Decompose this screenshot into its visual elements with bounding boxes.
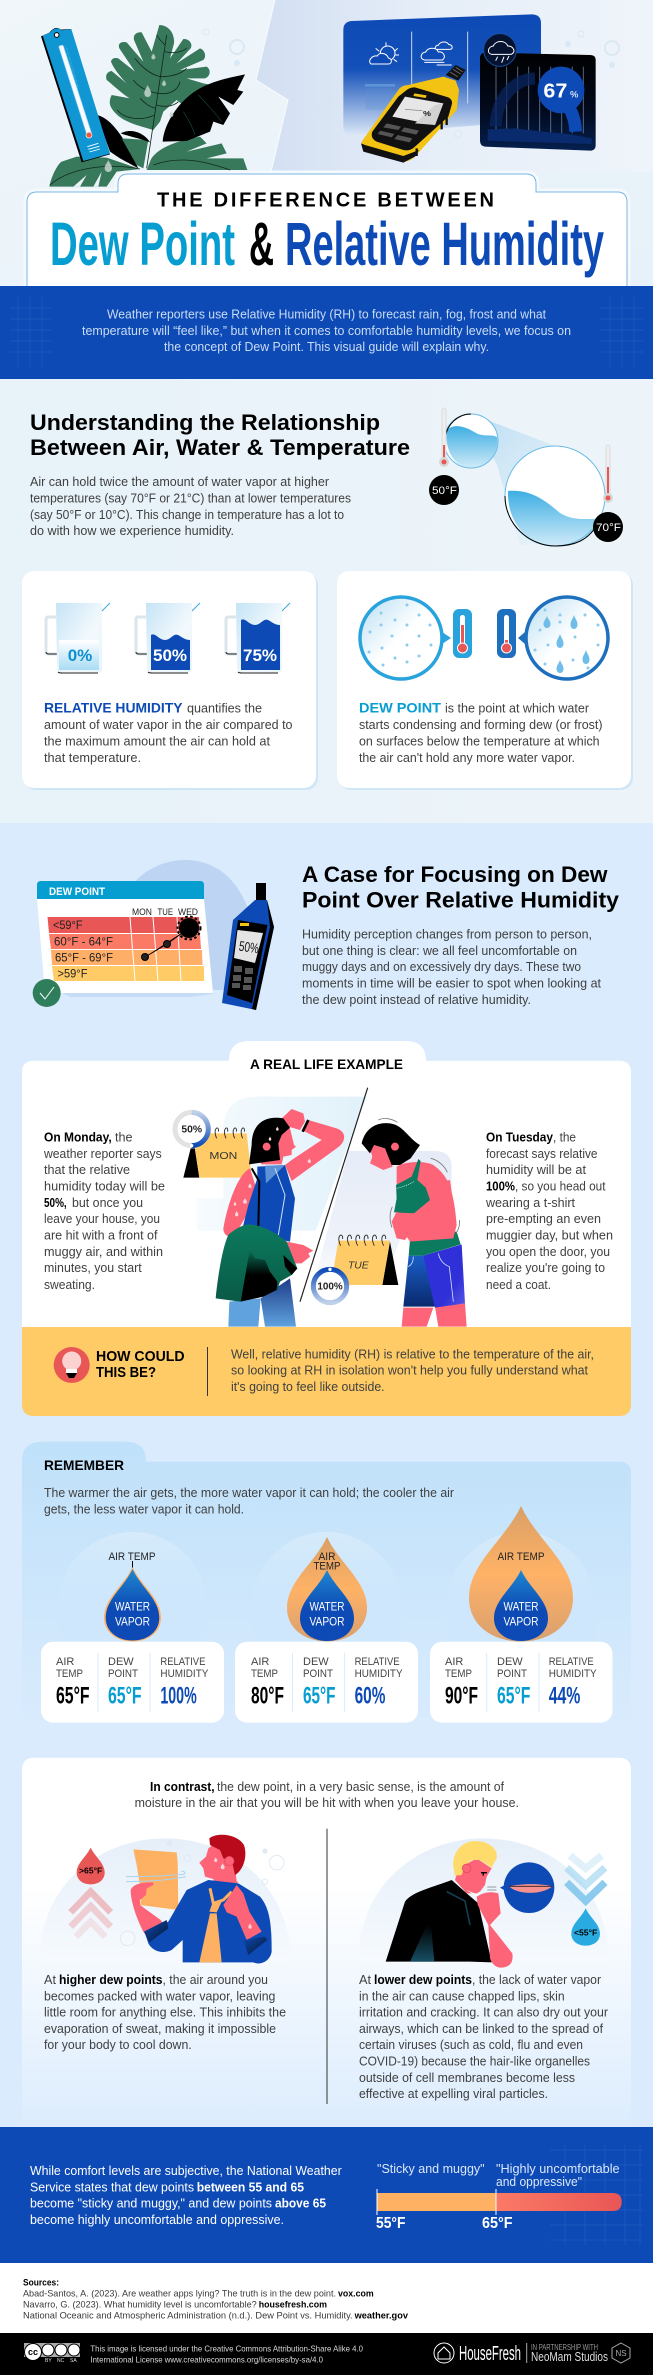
divider line between the two women [300,1088,368,1302]
icon: creative commons badge: BY [45,2358,52,2364]
logo: neomam studios: IN PARTNERSHIP WITH [531,2343,598,2352]
text: air can hold twice: do with how we experience humidity. [30,523,234,538]
illustration: air capacity circles: 50°F [432,485,457,497]
text: higher dew points: higher dew points [59,1972,162,1987]
text: on tuesday: 100% [486,1178,515,1194]
data card: 80°F air temp: DEW [303,1656,329,1668]
data card: 80°F air temp: 60% [355,1682,385,1710]
icon: jug 0% [46,603,110,673]
drop: 90°F [469,1506,573,1642]
sources: housefresh.com [259,2300,327,2310]
icon: drop above 65°F [77,1848,105,1884]
text: relative humidity definition: RELATIVE HUMIDITY [44,700,183,716]
heading: dew point and relative humidity: Dew Point [50,210,235,278]
data card: 65°F air temp [41,1642,224,1723]
heading: the difference between: THE DIFFERENCE BETWEEN [157,190,494,212]
drop: 80°F: VAPOR [310,1614,345,1628]
license text: This image is licensed under the Creative Commons Attribution-Share Alike 4.0 [90,2343,363,2353]
icon: creative commons badge: SA [70,2358,77,2364]
drop: 65°F: VAPOR [115,1614,150,1628]
text: on monday: that the relative [44,1162,130,1177]
illustration: dew point chart [33,860,254,1007]
section background: understanding [0,379,653,823]
data card: 90°F air temp: HUMIDITY [549,1668,597,1680]
data card: 90°F air temp: AIR [445,1656,463,1668]
illustration: air capacity circles [429,408,623,546]
text: on monday: weather reporter says [43,1146,162,1161]
text: higher dew points: little room for anything else. This inhibits the [44,2004,286,2020]
text: well relative humidity [231,1346,594,1394]
illustration: monstera plant [49,25,247,187]
data card: 90°F air temp: 90°F [445,1682,478,1710]
data card: 90°F air temp: TEMP [445,1668,472,1680]
text: well relative humidity: so looking at RH in isolation won't help you fully understand what [231,1362,588,1378]
intro text: Weather reporters use Relative Humidity (RH) to forecast rain, fog, frost and what [107,306,546,322]
heading: a case for focusing: A Case for Focusing on Dew [302,862,608,887]
text: well relative humidity: Well, relative humidity (RH) is relative to the temperature of the air, [231,1346,594,1362]
text: humidity perception [302,926,601,1007]
heading: a real life example: A REAL LIFE EXAMPLE [250,1056,403,1072]
calendar: MON: MON [209,1151,237,1162]
illustration: dew point chart: 60°F - 64°F [54,934,113,948]
text: air can hold twice: temperatures (say 70°F or 21°C) than at lower temperatures [30,490,351,506]
text: on monday [43,1130,165,1292]
title card [27,174,627,286]
heading: how could this be [96,1348,185,1381]
illustration: weather panel [343,14,541,135]
data card: 80°F air temp: AIR [251,1656,269,1668]
text: on monday: On Monday, [44,1130,112,1144]
text: relative humidity definition [44,700,292,765]
data card: 90°F air temp [430,1642,612,1723]
data card: 65°F air temp: 65°F [108,1682,142,1710]
icon: creative commons badge: NC [57,2358,65,2364]
logo: housefresh: HouseFresh [459,2343,521,2365]
text: on tuesday: pre-empting an even [486,1211,601,1226]
data card: 65°F air temp: TEMP [56,1668,83,1680]
text: higher dew points: At [44,1972,56,1987]
text: lower dew points: certain viruses (such as cold, flu and even [359,2037,583,2052]
text: humidity perception: muggy days and on excessively dry days. These two [302,959,581,974]
drop: 90°F: WATER [504,1600,539,1614]
text: in contrast intro: the dew point, in a very basic sense, is the amount of [217,1779,504,1794]
text: on monday: sweating. [44,1277,95,1292]
data card: 80°F air temp: 80°F [251,1682,284,1710]
text: while comfort levels: above 65 [275,2196,326,2210]
text: warmer air [44,1485,455,1516]
illustration: dew point chart: >59°F [58,966,88,980]
heading: remember: REMEMBER [44,1457,124,1473]
illustration: woman on monday [175,1097,367,1327]
text: higher dew points [44,1972,286,2052]
illustration: dew point chart: WED [178,907,198,917]
logo: housefresh [434,2343,521,2365]
gauge: 50% [175,1112,208,1147]
drop: 80°F: AIR [318,1551,336,1563]
background: header and first section [0,0,653,286]
license text: International License www.creativecommons.org/licenses/by-sa/4.0 [90,2355,323,2365]
icon: creative commons badge: cc [28,2347,38,2357]
drop: 80°F: WATER [310,1600,345,1614]
data card: 65°F air temp: 65°F [56,1682,90,1710]
text: dew point definition [359,700,602,765]
intro text: the concept of Dew Point. This visual guide will explain why. [164,339,489,354]
illustration: yellow hygrometer [361,65,466,163]
drop: 65°F: AIR TEMP [108,1551,156,1563]
illustration: dew point chart: <59°F [53,918,82,932]
text: dew point definition: is the point at which water [445,701,590,716]
text: on tuesday [485,1130,613,1292]
sources: weather.gov [354,2310,409,2322]
icon: chapped lips bubble [500,1862,554,1913]
heading: understanding the relationship [30,410,410,460]
drop: 65°F: WATER [115,1600,150,1614]
panel: in contrast [22,1758,631,2127]
sources: Navarro, G. (2023). What humidity level is uncomfortable? [23,2300,257,2310]
illustration: yellow hygrometer: % [423,109,432,118]
text: lower dew points: in the air can cause chapped lips, skin [359,1988,565,2004]
drop: 80°F: TEMP [314,1560,340,1572]
drop: 80°F [287,1537,367,1642]
illustration: black humidity gauge with 67%: 67 [543,79,567,102]
text: lower dew points: lower dew points [374,1972,472,1987]
panel: dew point [337,571,633,790]
text: lower dew points: COVID-19) because the hair-like organelles [359,2054,590,2068]
data card: 65°F air temp: DEW [108,1656,134,1668]
illustration: lower dew points man [359,1838,608,1968]
text: dew point definition: starts condensing and forming dew (or frost) [359,717,602,732]
sources: Sources: [23,2278,59,2288]
illustration: dew point chart: DEW POINT [49,886,105,898]
text: relative humidity definition: amount of water vapor in the air compared to [44,717,292,732]
data card: 80°F air temp: 65°F [303,1682,336,1710]
footer [0,2333,653,2375]
icon: jug 75%: 75% [243,646,277,665]
icon: drop below 55°F [571,1908,600,1946]
data card: 90°F air temp: 44% [549,1682,580,1710]
chart: dew point comfort scale [376,2161,622,2232]
text: humidity perception: the dew point instead of relative humidity. [302,992,531,1007]
calendar: TUE: TUE [348,1260,369,1271]
illustration: dew point chart: TUE [158,907,173,917]
chart: dew point comfort scale: 65°F [482,2215,513,2232]
text: lower dew points: effective at expelling viral particles. [359,2086,548,2101]
icon: cool air circle with droplets [497,597,608,679]
text: on monday: the [115,1130,132,1144]
text: in contrast intro [135,1779,519,1810]
text: dew point definition: the air can't hold any more water vapor. [359,750,575,765]
heading: understanding the relationship: Understanding the Relationship [30,410,380,435]
data card: 80°F air temp [235,1642,418,1723]
text: lower dew points: irritation and cracking. It can also dry out your [359,2004,609,2020]
text: relative humidity definition: the maximum amount the air can hold at [44,734,270,748]
text: humidity perception: moments in time will be easier to spot when looking at [302,976,601,990]
text: air can hold twice [30,474,351,538]
text: on tuesday: wearing a t-shirt [485,1195,575,1210]
data card: 80°F air temp: POINT [303,1668,333,1680]
text: on monday: leave your house, you [44,1211,160,1226]
text: lower dew points: , the lack of water vapor [472,1972,602,1987]
drop: 65°F [104,1551,161,1642]
illustration: black humidity gauge with 67% [480,34,596,151]
illustration: woman on tuesday [313,1119,467,1327]
illustration: dew point chart: 65°F - 69°F [55,950,113,964]
panel: relative humidity [22,571,318,790]
illustration: air capacity circles: 70°F [596,522,621,534]
text: higher dew points: becomes packed with water vapor, leaving [44,1988,275,2004]
text: on monday: but once you [72,1195,143,1210]
icon: drop above 65°F: >65°F [79,1866,102,1876]
text: well relative humidity: it's going to feel like outside. [231,1379,385,1394]
text: on monday: minutes, you start [44,1260,142,1275]
data card: 65°F air temp: 100% [160,1682,197,1710]
text: on tuesday: , so you head out [515,1178,606,1194]
chart: dew point comfort scale: "Highly uncomfortable [496,2161,620,2176]
text: warmer air: gets, the less water vapor it can hold. [44,1502,244,1516]
text: on tuesday: need a coat. [486,1277,551,1292]
illustration: blue hygrometer: 50% [238,938,260,956]
heading: dew point and relative humidity: & [249,210,274,278]
text: while comfort levels [30,2163,342,2227]
text: while comfort levels: become highly uncomfortable and oppressive. [30,2212,284,2227]
text: while comfort levels: Service states that dew points [30,2180,194,2194]
section background: case for dew point [0,823,653,2127]
icon: light bulb [54,1347,90,1383]
calendar: MON [183,1128,252,1178]
drop: 90°F: VAPOR [504,1614,539,1628]
data card: 90°F air temp: POINT [497,1668,527,1680]
gauge: 100% [313,1268,347,1303]
heading: how could this be: HOW COULD [96,1348,185,1365]
illustration: blue hygrometer [222,883,274,1010]
callout: how could this be [22,1327,631,1416]
icon: creative commons badge [24,2343,80,2364]
text: air can hold twice: Air can hold twice the amount of water vapor at higher [30,474,330,489]
text: on tuesday: forecast says relative [486,1146,598,1161]
band: comfort levels [0,2127,653,2263]
text: dew point definition: on surfaces below the temperature at which [359,734,600,748]
text: dew point definition: DEW POINT [359,700,441,716]
text: on monday: are hit with a front of [44,1228,158,1242]
text: relative humidity definition: quantifies the [187,701,262,716]
illustration: black humidity gauge with 67%: % [570,89,579,99]
sources: vox.com [338,2289,374,2300]
text: lower dew points [359,1972,609,2101]
text: on tuesday: you open the door, you [486,1244,610,1259]
text: on tuesday: realize you're going to [486,1260,605,1275]
gauge: 100%: 100% [317,1282,343,1293]
intro text [82,306,571,354]
data card: 65°F air temp: POINT [108,1668,138,1680]
text: higher dew points: evaporation of sweat, making it impossible [44,2021,276,2036]
text: relative humidity definition: that temperature. [44,750,141,765]
text: warmer air: The warmer the air gets, the more water vapor it can hold; the cooler the air [44,1485,455,1500]
icon: jug 50% [136,603,200,673]
drop: 90°F: AIR TEMP [498,1551,544,1563]
panel: remember [22,1442,631,1723]
text: humidity perception: but one thing is clear: we all feel uncomfortable on [302,943,577,958]
text: lower dew points: outside of cell membranes become less [359,2070,575,2085]
data card: 65°F air temp: AIR [56,1656,74,1668]
heading: dew point and relative humidity [50,210,604,278]
intro text: temperature will “feel like,” but when it comes to comfortable humidity levels, we focus on [82,323,571,338]
heading: a case for focusing [302,862,620,913]
chart: dew point comfort scale: and oppressive" [496,2174,582,2189]
text: higher dew points: , the air around you [162,1972,268,1987]
icon: up chevrons [71,1892,111,1937]
text: on monday: 50%, [44,1195,67,1210]
text: while comfort levels: become "sticky and muggy," and dew points [30,2196,272,2210]
chart: dew point comfort scale: "Sticky and muggy" [377,2161,485,2176]
text: in contrast intro: moisture in the air that you will be hit with when you leave your house. [135,1795,519,1810]
data card: 65°F air temp: HUMIDITY [160,1668,209,1680]
gauge: 50%: 50% [181,1125,202,1136]
text: on tuesday: humidity will be at [486,1162,586,1177]
text: higher dew points: for your body to cool down. [44,2037,192,2052]
sources [0,2263,653,2333]
data card: 90°F air temp: RELATIVE [549,1656,594,1668]
text: on monday: humidity today will be [44,1178,165,1194]
illustration: thermometer [41,28,110,162]
text: on tuesday: On Tuesday [486,1130,554,1144]
text: while comfort levels: between 55 and 65 [197,2180,304,2194]
icon: drop below 55°F: <55°F [574,1927,597,1937]
text: lower dew points: airways, which can be linked to the spread of [359,2021,603,2036]
sources: Abad-Santos, A. (2023). Are weather apps lying? The truth is in the dew point. [23,2289,336,2300]
calendar: TUE [331,1235,398,1285]
icon: down chevrons [567,1856,605,1901]
illustration: higher dew points man [40,1835,290,1963]
data card: 90°F air temp: DEW [497,1656,523,1668]
logo: neomam studios: NeoMam Studios [531,2349,608,2364]
heading: how could this be: THIS BE? [96,1364,156,1381]
icon: jug 0%: 0% [68,646,92,665]
text: on tuesday: muggier day, but when [486,1228,613,1242]
text: on tuesday: , the [553,1130,576,1144]
data card: 90°F air temp: 65°F [497,1682,530,1710]
text: in contrast intro: In contrast, [150,1779,215,1794]
sources: National Oceanic and Atmospheric Administration (n.d.). Dew Point vs. Humidity. [23,2310,353,2322]
license text [90,2343,363,2365]
heading: a case for focusing: Point Over Relative Humidity [302,888,620,913]
text: on monday: muggy air, and within [44,1244,163,1259]
panel: a real life example [22,1041,631,1327]
data card: 80°F air temp: HUMIDITY [355,1668,403,1680]
text: lower dew points: At [359,1972,371,1987]
heading: understanding the relationship: Between Air, Water & Temperature [30,435,410,460]
icon: warm air circle [360,597,472,679]
icon: jug 75% [226,603,290,673]
text: air can hold twice: (say 50°F or 10°C). This change in temperature has a lot to [30,507,344,522]
icon: jug 50%: 50% [153,646,187,665]
data card: 65°F air temp: RELATIVE [160,1656,205,1668]
intro band [0,286,653,379]
data card: 80°F air temp: RELATIVE [355,1656,400,1668]
illustration: dew point chart: MON [132,907,152,917]
logo: neomam studios: NS [615,2349,627,2358]
data card: 80°F air temp: TEMP [251,1668,278,1680]
text: while comfort levels: While comfort levels are subjective, the National Weather [30,2163,342,2178]
text: humidity perception: Humidity perception changes from person to person, [302,926,592,942]
chart: dew point comfort scale: 55°F [376,2215,406,2232]
